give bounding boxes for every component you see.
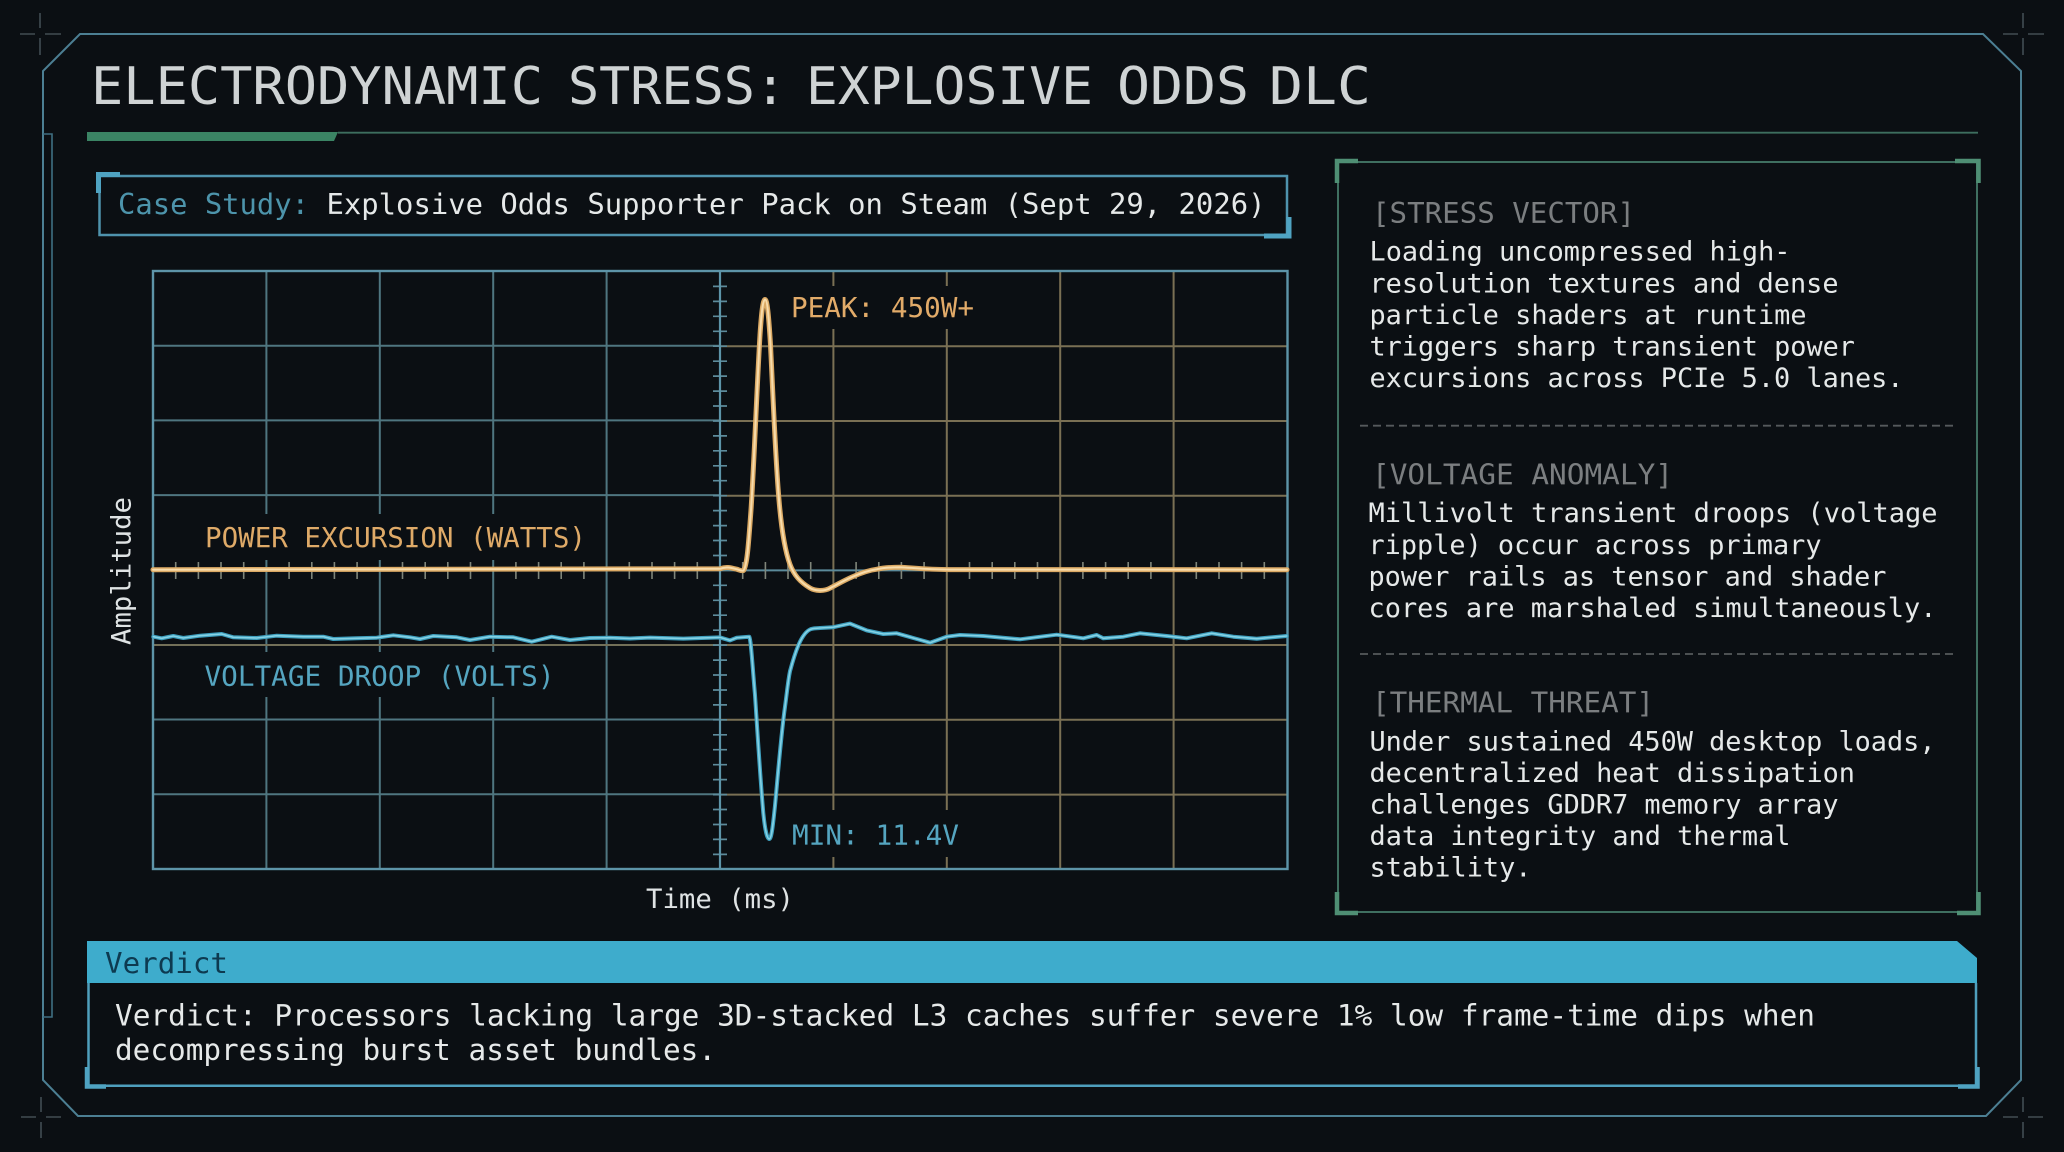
title: DLC	[1269, 57, 1371, 117]
text block: stress vector: resolution textures and dense	[1370, 268, 1838, 299]
label: min: MIN: 11.4V	[792, 820, 959, 852]
power excursion trace	[153, 300, 1287, 590]
text block: thermal threat: stability.	[1370, 853, 1532, 884]
case study box	[98, 174, 1289, 236]
text block: voltage anomaly: Millivolt transient droops (voltage	[1368, 498, 1938, 529]
chart grid	[153, 271, 1287, 869]
verdict header bar	[87, 941, 1977, 983]
text block: voltage anomaly: ripple) occur across primary	[1368, 530, 1822, 561]
title: STRESS:	[568, 57, 786, 117]
label: peak: PEAK: 450W+	[791, 293, 974, 324]
verdict body text: decompressing burst asset bundles.	[115, 1033, 716, 1067]
vertical centre axis with ticks	[713, 286, 727, 854]
title: ODDS	[1117, 57, 1249, 117]
verdict body text	[115, 999, 1815, 1067]
horizontal axis ticks	[176, 562, 1264, 579]
text block: thermal threat: Under sustained 450W desktop loads,	[1370, 726, 1936, 757]
case study text: Explosive Odds Supporter Pack on Steam (Sept 29, 2026)	[326, 187, 1266, 221]
heading: thermal threat: [THERMAL THREAT]	[1372, 686, 1654, 720]
x axis label: Time (ms)	[646, 884, 794, 915]
text block: stress vector: triggers sharp transient power	[1370, 332, 1855, 362]
verdict body text: Verdict: Processors lacking large 3D-stacked L3 caches suffer severe 1% low frame-time dips when	[115, 999, 1815, 1033]
text block: stress vector: particle shaders at runtime	[1370, 300, 1806, 331]
text block: thermal threat: challenges GDDR7 memory array	[1370, 790, 1838, 821]
text block: thermal threat: decentralized heat dissipation	[1370, 758, 1855, 789]
voltage droop trace	[153, 624, 1287, 839]
text block: thermal threat: data integrity and thermal	[1370, 821, 1790, 852]
panel: verdict	[87, 941, 1978, 1086]
y axis label: Amplitude	[106, 497, 138, 645]
label: power excursion: POWER EXCURSION (WATTS)	[205, 523, 586, 554]
text block: voltage anomaly	[1368, 498, 1938, 624]
oscilloscope chart	[106, 271, 1288, 915]
chart border	[153, 271, 1288, 869]
title: EXPLOSIVE	[806, 57, 1093, 117]
panel: analysis	[1337, 161, 1978, 913]
title underline	[87, 132, 1978, 141]
text block: voltage anomaly: power rails as tensor and shader	[1368, 561, 1886, 592]
label: voltage droop: VOLTAGE DROOP (VOLTS)	[204, 662, 554, 693]
text block: stress vector: Loading uncompressed high-	[1370, 237, 1790, 268]
title	[91, 57, 1371, 117]
heading: stress vector: [STRESS VECTOR]	[1372, 196, 1635, 230]
text block: stress vector	[1370, 237, 1904, 394]
text block: voltage anomaly: cores are marshaled simultaneously.	[1368, 593, 1936, 624]
text block: thermal threat	[1370, 726, 1936, 884]
heading: voltage anomaly: [VOLTAGE ANOMALY]	[1372, 458, 1673, 492]
text block: stress vector: excursions across PCIe 5.0 lanes.	[1370, 363, 1904, 394]
verdict header text: Verdict	[105, 946, 228, 980]
case study label: Case Study:	[118, 187, 309, 221]
label backing masks	[190, 286, 985, 857]
title: ELECTRODYNAMIC	[91, 57, 543, 117]
